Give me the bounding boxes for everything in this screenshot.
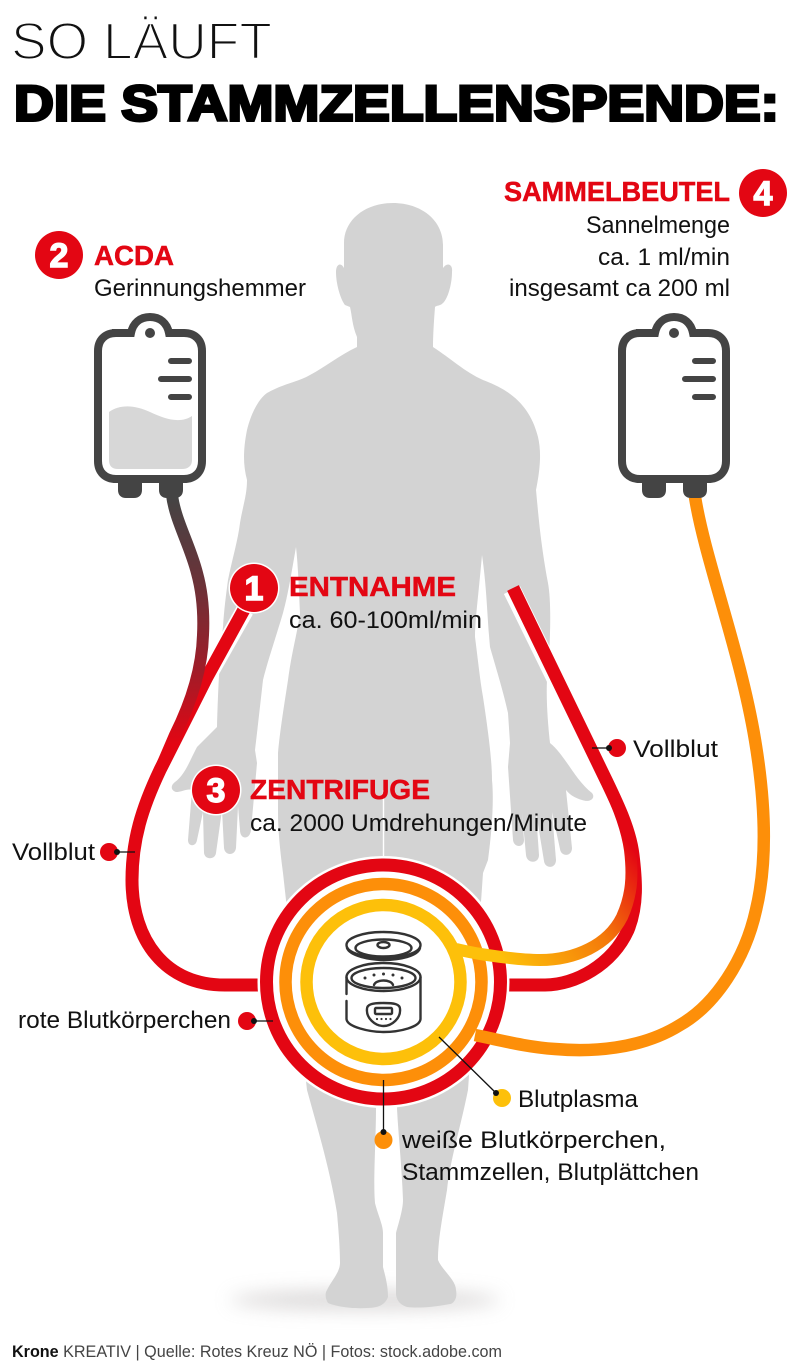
- tube: plasma and cells return: [456, 782, 631, 960]
- label: collection bag: ca. 1 ml/min: [598, 244, 730, 271]
- label: collection bag: Sannelmenge: [586, 212, 730, 239]
- body silhouette: [172, 203, 593, 1308]
- callout: white blood cells: Stammzellen, Blutplättchen: [402, 1159, 699, 1186]
- footer source: Krone KREATIV | Quelle: Rotes Kreuz NÖ | Fotos: stock.adobe.com: [12, 1343, 502, 1361]
- label: centrifuge: ZENTRIFUGE: [250, 774, 430, 805]
- callout: whole blood left: Vollblut: [12, 839, 95, 866]
- label: collection bag: SAMMELBEUTEL: [504, 176, 730, 207]
- label: centrifuge: 3: [207, 772, 225, 810]
- tube: whole blood left (halo and line): [132, 606, 258, 985]
- callout: plasma: [439, 1037, 639, 1113]
- label: ACDA: ACDA: [94, 240, 174, 271]
- label: withdrawal: ca. 60-100ml/min: [289, 607, 482, 634]
- label: collection bag: [504, 169, 787, 302]
- label: collection bag: insgesamt ca 200 ml: [509, 275, 730, 302]
- icon: collection bag: [622, 317, 726, 498]
- label: withdrawal: ENTNAHME: [289, 571, 456, 602]
- title: [11, 13, 779, 132]
- label: collection bag: 4: [754, 175, 773, 213]
- floor shadow: [230, 1290, 500, 1310]
- label: centrifuge: ca. 2000 Umdrehungen/Minute: [250, 810, 587, 837]
- callout: whole blood right: Vollblut: [633, 736, 718, 763]
- callout: white blood cells: [374, 1080, 699, 1186]
- icon: bag ACDA: [98, 317, 202, 498]
- label: withdrawal: 1: [245, 570, 263, 608]
- callout: whole blood right: [592, 736, 718, 763]
- icon: centrifuge: [346, 932, 420, 1032]
- tube: whole blood right: [500, 588, 635, 985]
- title: SO LÄUFT: [11, 13, 272, 71]
- callout: whole blood left: [12, 839, 135, 866]
- label: ACDA: 2: [50, 237, 68, 275]
- label: ACDA: [35, 231, 306, 302]
- callout: plasma: Blutplasma: [518, 1086, 639, 1113]
- centrifuge rings: [258, 856, 510, 1108]
- tube: collection bag line: [475, 497, 764, 1050]
- callout: red blood cells: rote Blutkörperchen: [18, 1007, 231, 1034]
- label: ACDA: Gerinnungshemmer: [94, 275, 306, 302]
- title: DIE STAMMZELLENSPENDE:: [14, 76, 779, 132]
- callout: white blood cells: weiße Blutkörperchen,: [401, 1127, 666, 1154]
- label: centrifuge: [190, 764, 587, 837]
- label: withdrawal: [228, 562, 482, 634]
- tube: ACDA anticoagulant: [160, 495, 203, 770]
